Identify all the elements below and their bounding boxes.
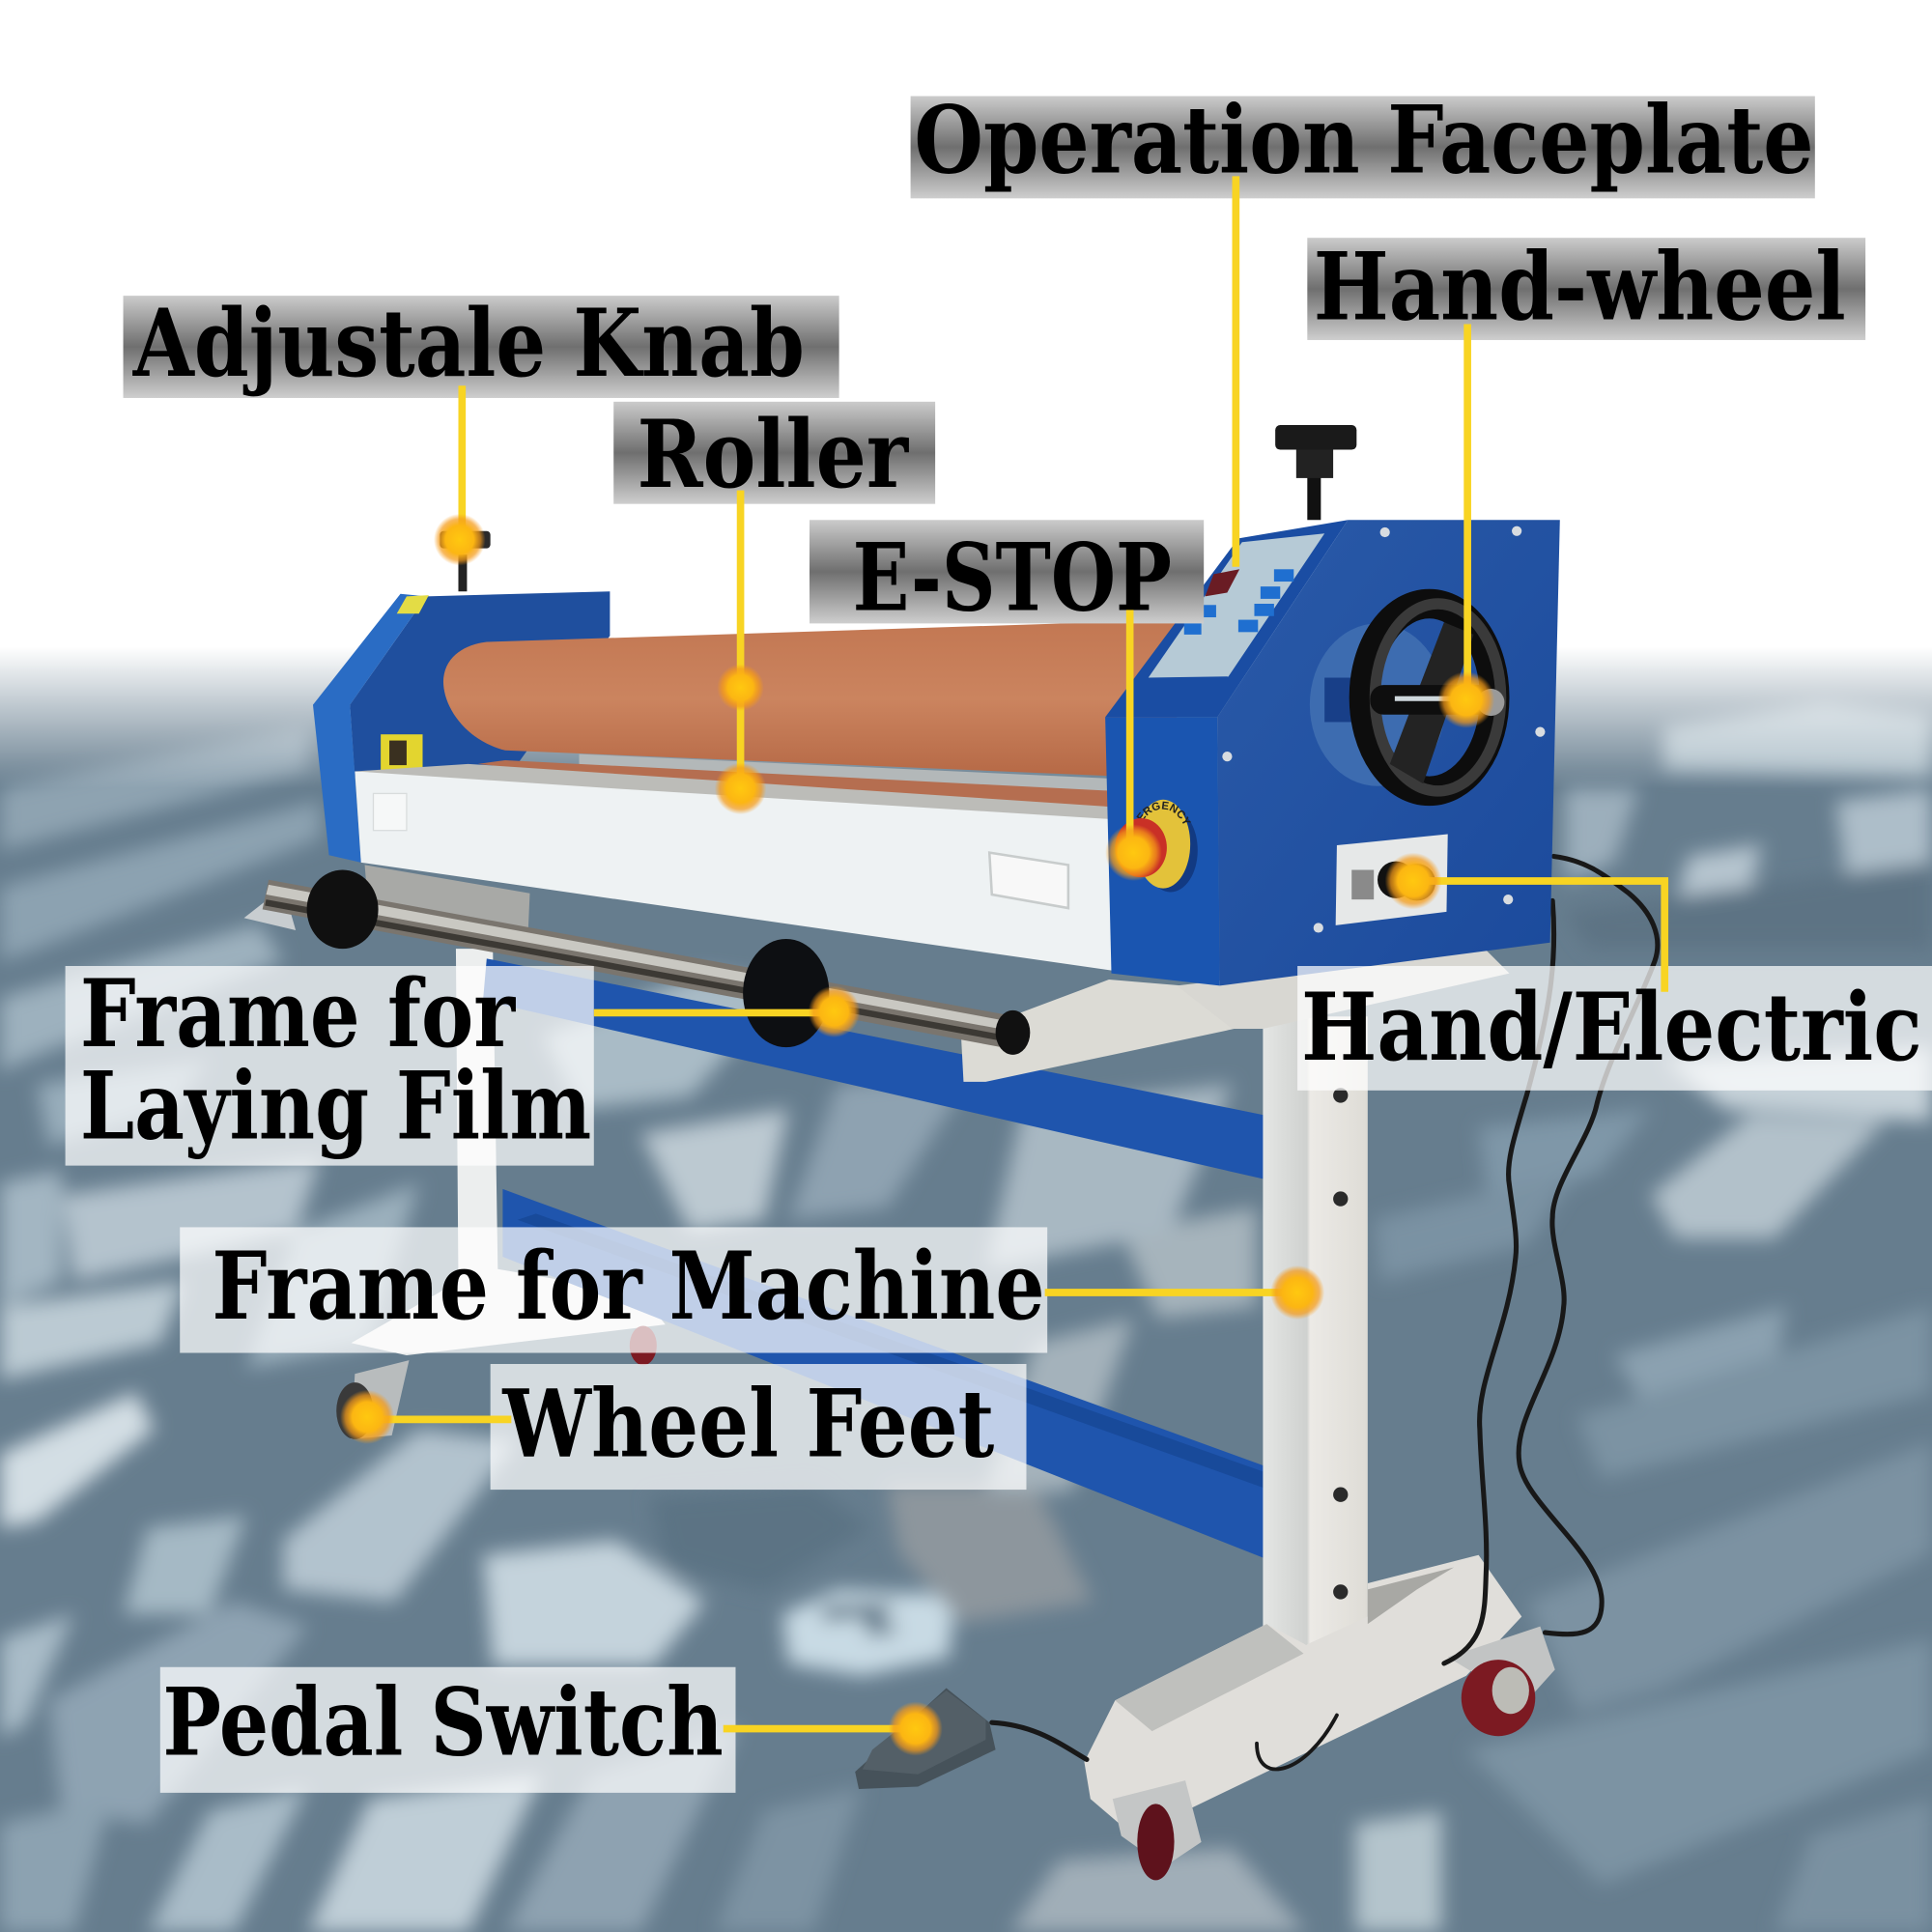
label: Roller: Roller (637, 399, 910, 509)
icon: E-stop button: EMERGENCY (1136, 802, 1191, 824)
shadow under wheel (1310, 623, 1445, 786)
icon: E-stop button (1115, 800, 1198, 893)
control panel (1149, 533, 1324, 678)
front face (1105, 717, 1220, 985)
label: Pedal Switch: Pedal Switch (162, 1666, 724, 1776)
icon: pedal switch (855, 1688, 996, 1789)
side face (1217, 520, 1560, 985)
label: Frame for Laying Film: Frame for (80, 958, 517, 1068)
machine: right control housing (1105, 520, 1560, 985)
icon: power cables (992, 856, 1658, 1769)
label: Adjustale Knab: Adjustale Knab (132, 288, 805, 398)
base foot (1084, 1555, 1521, 1836)
machine: film rod with holders (244, 870, 1509, 1082)
label: Frame for Machine: Frame for Machine (212, 1231, 1045, 1341)
icon: hand-wheel (1364, 604, 1504, 791)
main roller (443, 620, 1177, 779)
icon: casters (336, 1325, 1555, 1880)
screws (1222, 526, 1545, 933)
machine: left side panel (313, 591, 610, 863)
label: Hand-wheel: Hand-wheel (1314, 231, 1846, 341)
label: E-STOP: E-STOP (853, 522, 1172, 632)
glowing marker dots (340, 514, 1494, 1756)
sloped top (1105, 520, 1348, 717)
right leg (1263, 1016, 1368, 1645)
under bracket (365, 865, 529, 949)
icon: hand/electric switch plate (1336, 835, 1448, 925)
icon: adjust knobs (440, 425, 1356, 591)
label: Frame for Laying Film: Laying Film (80, 1051, 591, 1161)
lower blue beam (502, 1189, 1265, 1559)
leader lines (370, 176, 1664, 1729)
lower roller (478, 760, 1115, 809)
tray (355, 771, 1115, 971)
label: Frame for Laying Film (66, 958, 594, 1166)
silver bar (579, 754, 1115, 795)
left leg (352, 949, 666, 1355)
machine: rollers and tray (355, 620, 1177, 971)
label: Wheel Feet: Wheel Feet (502, 1369, 995, 1479)
machine: lower frame and beams (352, 949, 1521, 1836)
upper blue beam (483, 958, 1264, 1179)
